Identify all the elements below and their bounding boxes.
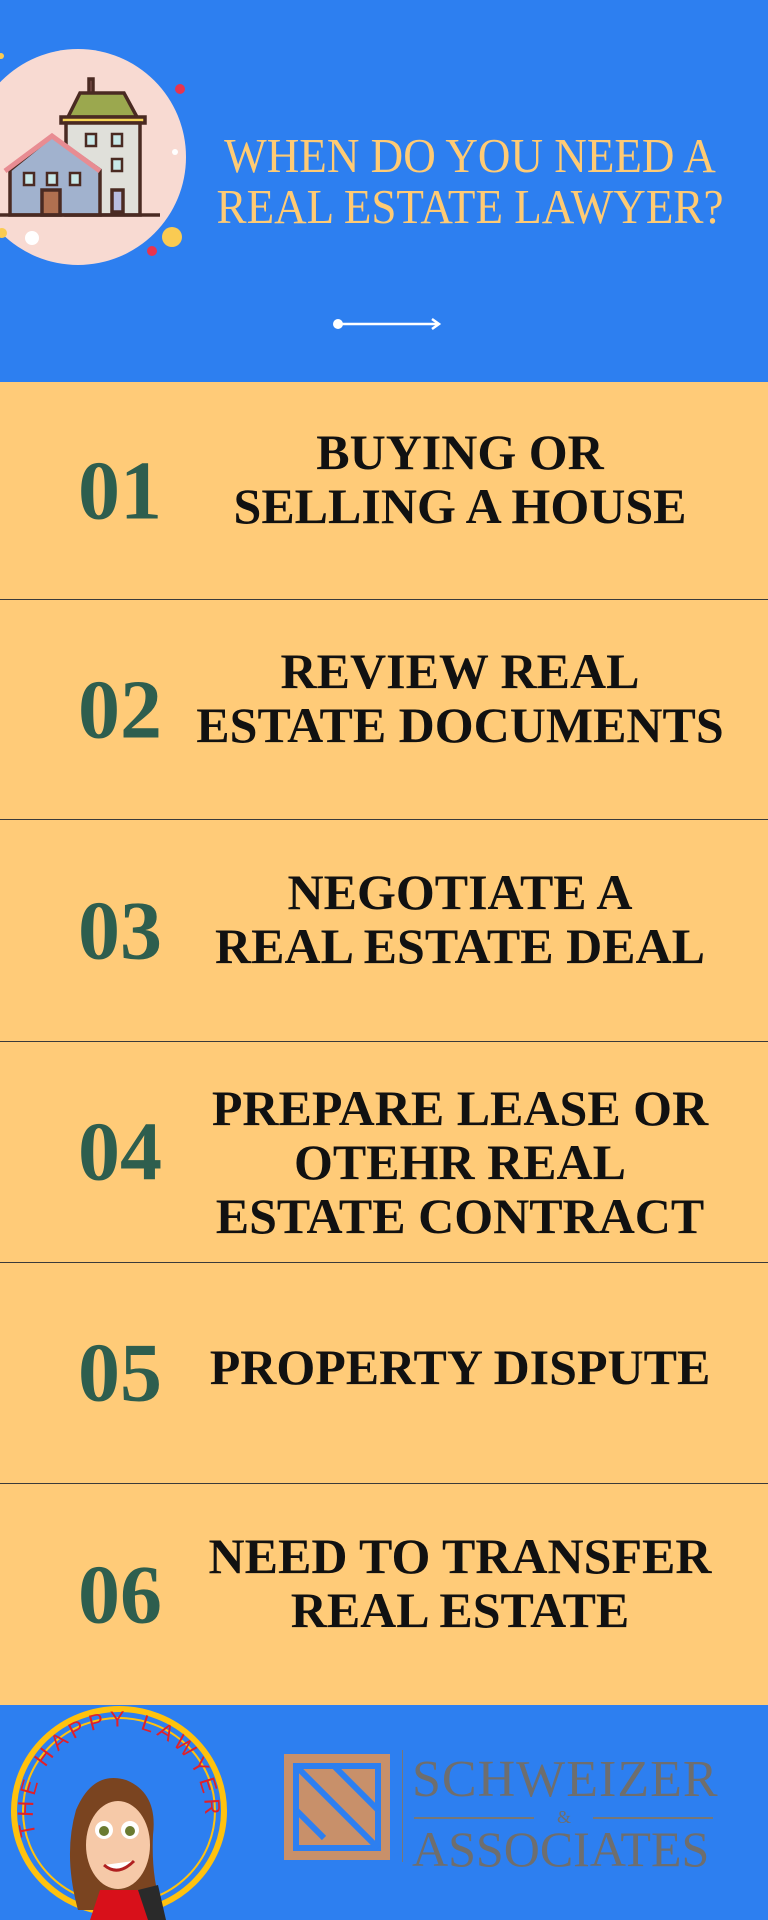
item 06: 06 [78,1548,162,1641]
item 06 [0,1483,768,1705]
item 04: 04 [78,1106,162,1198]
item 02: REVIEW REAL [281,642,639,698]
item 05: PROPERTY DISPUTE [210,1339,710,1395]
item 01: 01 [78,444,162,537]
item 03: REAL ESTATE DEAL [215,918,705,974]
item 04: ESTATE CONTRACT [216,1188,704,1244]
logo: schweizer & associates [284,1750,719,1877]
item 02: 02 [78,663,162,756]
item 02: ESTATE DOCUMENTS [196,696,724,752]
title: REAL ESTATE LAWYER? [217,179,723,234]
arrow [333,318,441,330]
item 04 [0,1041,768,1262]
icon: houses in circle [0,49,186,265]
item 03: NEGOTIATE A [288,864,632,920]
item 06: REAL ESTATE [291,1582,629,1638]
footer [0,1705,768,1920]
item 03 [0,819,768,1041]
item 05 [0,1262,768,1483]
logo: the happy lawyer: THE HAPPY LAWYER [18,1711,220,1838]
logo: schweizer & associates: ASSOCIATES [412,1821,709,1877]
item 05: 05 [78,1326,162,1420]
logo: schweizer & associates: & [557,1807,571,1827]
item 01: SELLING A HOUSE [234,478,686,534]
header panel [0,0,768,382]
item 01: BUYING OR [316,424,604,480]
logo: schweizer & associates: SCHWEIZER [412,1751,719,1808]
item 04: PREPARE LEASE OR [212,1080,708,1136]
item 03: 03 [78,884,162,977]
title [217,128,723,234]
item 04: OTEHR REAL [294,1134,626,1190]
item 01 [0,382,768,599]
item 06: NEED TO TRANSFER [209,1528,711,1584]
item 02 [0,599,768,819]
title: WHEN DO YOU NEED A [224,128,716,183]
logo: the happy lawyer [11,1706,227,1920]
